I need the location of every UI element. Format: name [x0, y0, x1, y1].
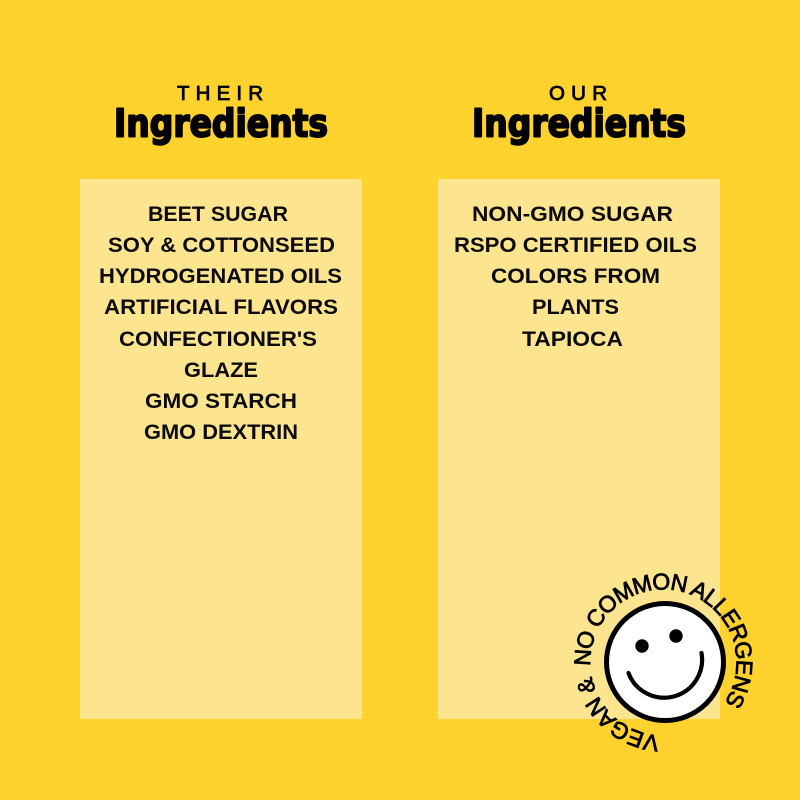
icon: smiley face [606, 604, 724, 720]
heading: our ingredients: OUR [549, 82, 607, 105]
circular caption: VEGAN & NO COMMON ALLERGENS [574, 573, 753, 752]
heading: their ingredients: Ingredients [114, 102, 328, 146]
panel: their ingredients list: CONFECTIONER'S [119, 327, 317, 351]
badge: smiley with vegan and no common allergens [574, 573, 753, 752]
panel: their ingredients list: SOY & COTTONSEED [108, 233, 335, 257]
panel: their ingredients list: ARTIFICIAL FLAVORS [104, 295, 338, 319]
panel: our ingredients list: NON-GMO SUGAR [472, 202, 673, 226]
heading: our ingredients [472, 82, 686, 146]
panel: their ingredients list: GLAZE [184, 358, 258, 382]
panel: their ingredients list [80, 179, 362, 719]
heading: our ingredients: Ingredients [472, 102, 686, 146]
heading: their ingredients [114, 82, 328, 146]
panel: our ingredients list: PLANTS [532, 295, 619, 319]
panel: their ingredients list: HYDROGENATED OILS [99, 264, 342, 288]
panel: our ingredients list: RSPO CERTIFIED OILS [454, 233, 697, 257]
panel: their ingredients list: BEET SUGAR [148, 202, 288, 226]
panel: their ingredients list: GMO STARCH [145, 389, 297, 413]
panel: their ingredients list: GMO DEXTRIN [144, 420, 298, 444]
panel: our ingredients list: COLORS FROM [491, 264, 660, 288]
panel: our ingredients list [438, 179, 720, 719]
heading: their ingredients: THEIR [177, 82, 263, 105]
panel: our ingredients list: TAPIOCA [522, 327, 623, 351]
